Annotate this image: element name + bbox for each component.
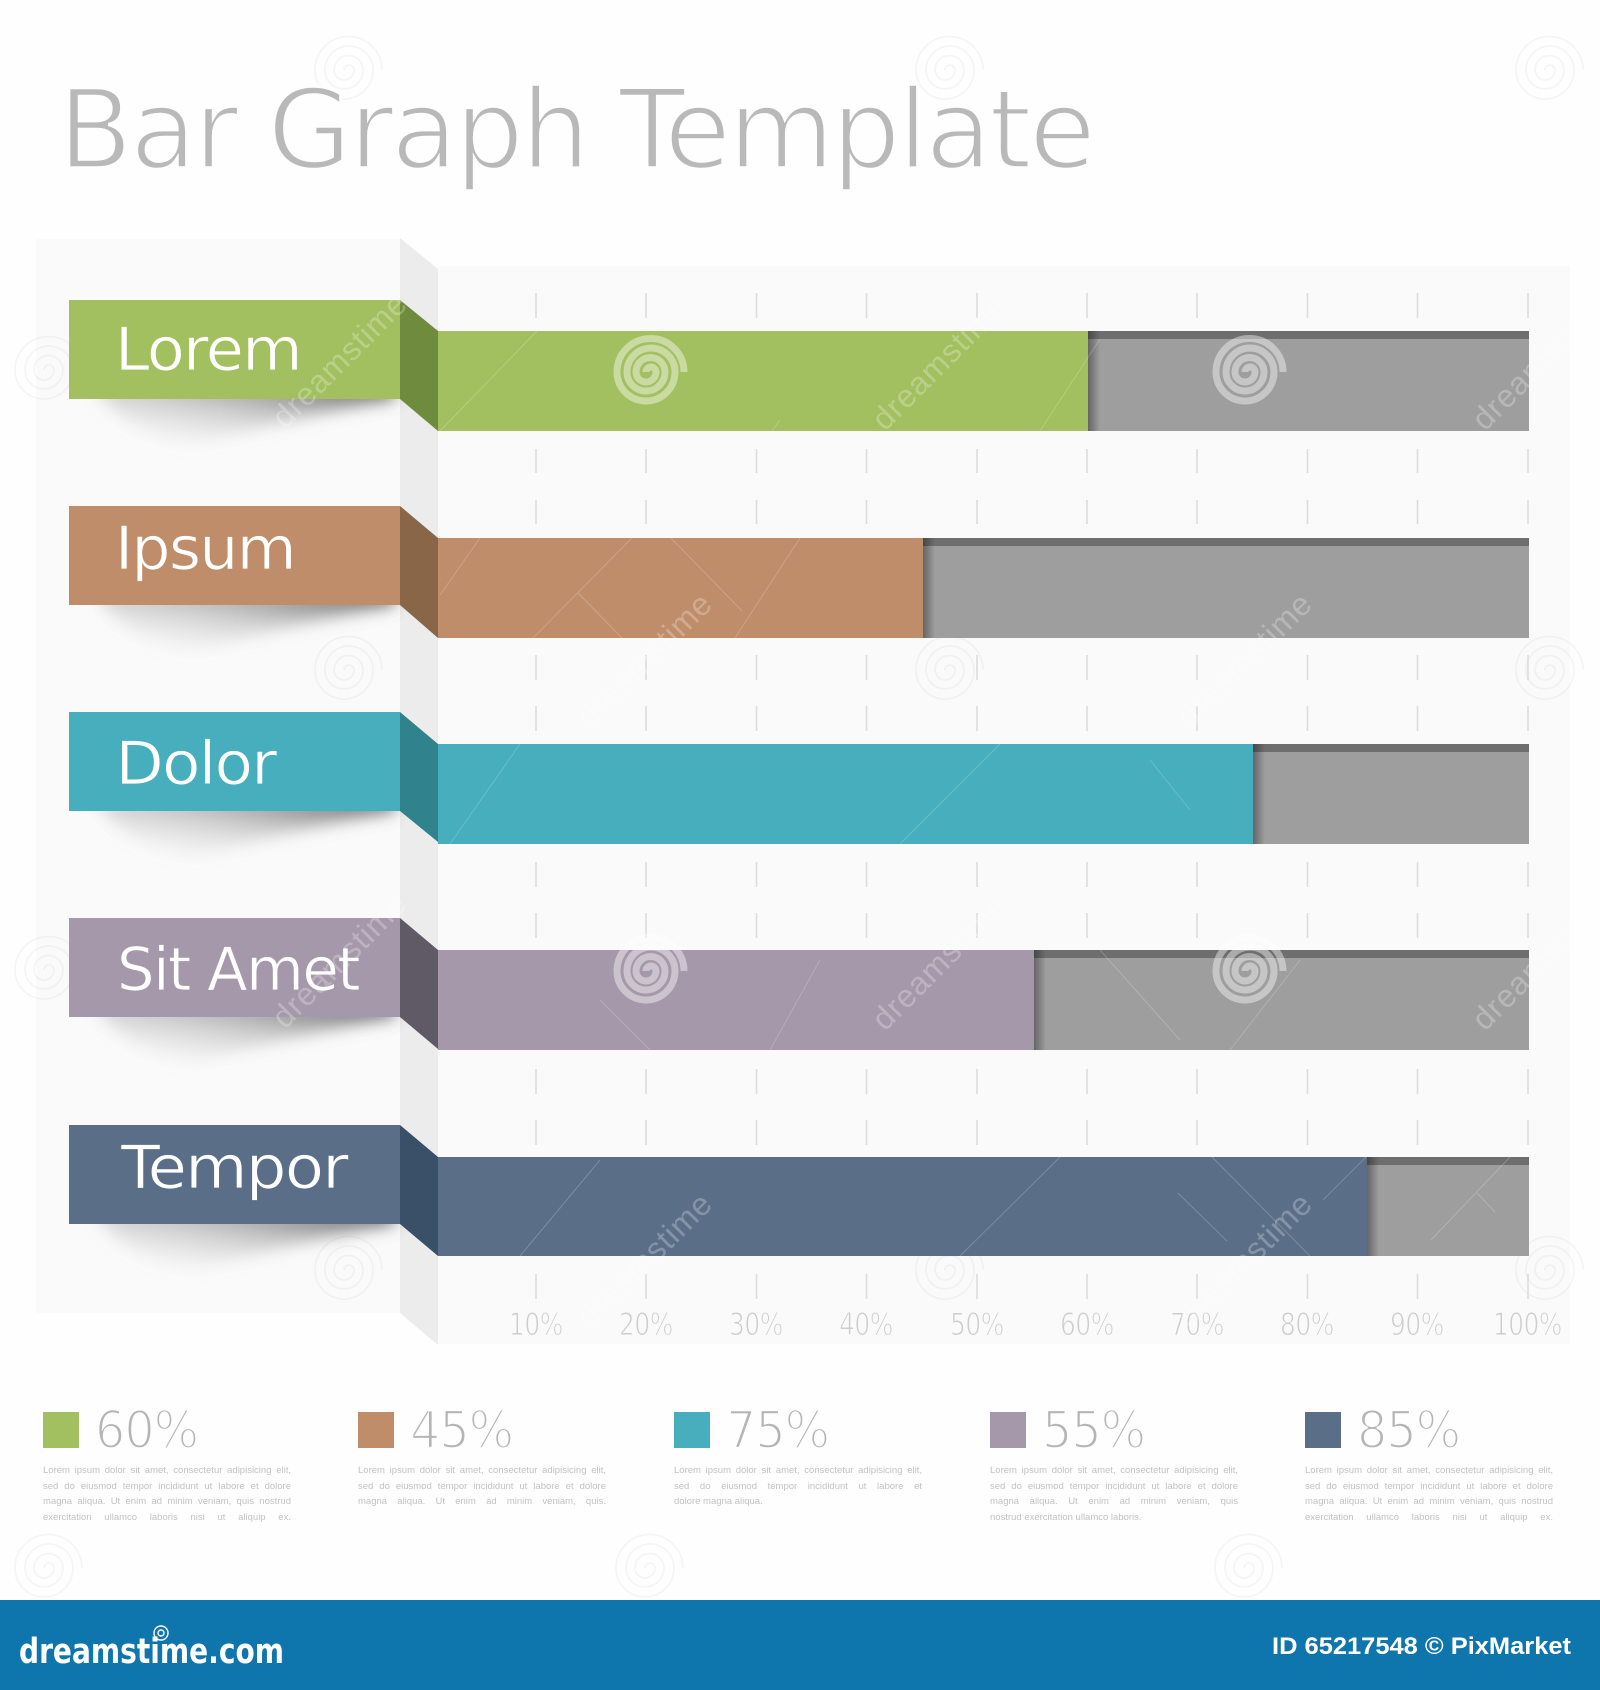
legend text: 60%: exercitation ullamco laboris nisi ut aliquip ex. [43,1512,291,1523]
watermark text: dreamstime [864,288,1014,437]
legend text: 85%: exercitation ullamco laboris nisi ut aliquip ex. [1305,1512,1553,1523]
axis labels: 40% [839,1307,893,1343]
footer credit: ID 65217548 © PixMarket [1272,1633,1571,1660]
legend text: 45% [358,1465,606,1507]
legend percentages: 60% [95,1401,198,1461]
axis labels: 10% [509,1307,563,1343]
axis labels: 30% [729,1307,783,1343]
chart panel: right background [438,266,1570,1344]
legend percentages: 45% [410,1401,513,1461]
row: Tempor 85%: Tempor [120,1133,349,1203]
watermark text: dreamstime [864,888,1014,1037]
row: Ipsum 45% [69,506,1529,651]
legend text: 85% [1305,1465,1553,1523]
legend text: 60% [43,1465,291,1523]
legend text: 55%: Lorem ipsum dolor sit amet, consectetur adipisicing elit, [990,1465,1238,1476]
watermark text: dreamstime [569,586,719,735]
row: Dolor 75% [69,712,1529,857]
row: Sit Amet 55% [69,918,1529,1063]
legend percentages: 85% [1357,1401,1460,1461]
legend text: 55%: nostrud exercitation ullamco laboris. [990,1512,1142,1523]
row: Lorem 60%: Lorem [115,315,301,385]
watermark text: dreamstime [569,1186,719,1335]
legend swatches [43,1412,1341,1448]
watermark text: dreamstime [1169,586,1319,735]
axis labels: 20% [619,1307,673,1343]
axis labels: 90% [1390,1307,1444,1343]
row: Sit Amet 55%: Sit Amet [117,935,360,1005]
legend text: 75%: sed do eiusmod tempor incididunt ut labore et [674,1481,922,1492]
legend text: 45%: magna aliqua. Ut enim ad minim veniam, quis. [358,1496,606,1507]
legend text: 85%: sed do eiusmod tempor incididunt ut labore et dolore [1305,1481,1553,1492]
legend text: 60%: sed do eiusmod tempor incididunt ut labore et dolore [43,1481,291,1492]
watermark text: dreamstime [264,286,414,435]
legend text: 55%: sed do eiusmod tempor incididunt ut labore et dolore [990,1481,1238,1492]
legend text: 45%: sed do eiusmod tempor incididunt ut labore et dolore [358,1481,606,1492]
axis tick marks [536,293,1528,1299]
legend text: 45%: Lorem ipsum dolor sit amet, consectetur adipisicing elit, [358,1465,606,1476]
axis labels: 70% [1170,1307,1224,1343]
legend percentages: 75% [726,1401,829,1461]
footer bar [0,1600,1600,1690]
legend text: 55%: magna aliqua. Ut enim ad minim veniam, quis [990,1496,1238,1507]
axis labels: 50% [950,1307,1004,1343]
axis labels: 60% [1060,1307,1114,1343]
watermark text [264,286,1600,1335]
row: Lorem 60% [69,300,1529,445]
row: Dolor 75%: Dolor [116,729,277,799]
watermark lines on bars [440,331,1510,1256]
legend text: 75%: dolore magna aliqua. [674,1496,763,1507]
fold strip between labels and chart [400,238,438,1345]
watermark text: dreamstime [264,886,414,1035]
legend text: 85%: magna aliqua. Ut enim ad minim veniam, quis nostrud [1305,1496,1553,1507]
legend text: 85%: Lorem ipsum dolor sit amet, consectetur adipisicing elit, [1305,1465,1553,1476]
legend percentages [95,1401,1460,1461]
legend percentages: 55% [1042,1401,1145,1461]
legend text: 60%: magna aliqua. Ut enim ad minim veniam, quis nostrud [43,1496,291,1507]
title: Bar Graph Template [58,66,1093,195]
legend text: 75% [674,1465,922,1507]
axis labels: 80% [1280,1307,1334,1343]
chart panel: left background [36,239,400,1313]
footer logo: dreamstime.com [19,1632,284,1672]
axis labels: 100% [1493,1307,1562,1343]
row: Ipsum 45%: Ipsum [115,514,295,584]
legend text: 60%: Lorem ipsum dolor sit amet, consectetur adipisicing elit, [43,1465,291,1476]
legend text: 55% [990,1465,1238,1523]
legend text: 75%: Lorem ipsum dolor sit amet, consectetur adipisicing elit, [674,1465,922,1476]
axis labels [509,1307,1562,1343]
watermark text: dreamstime [1169,1186,1319,1335]
watermark spirals on bars [617,338,1283,1000]
row: Tempor 85% [69,1125,1529,1270]
